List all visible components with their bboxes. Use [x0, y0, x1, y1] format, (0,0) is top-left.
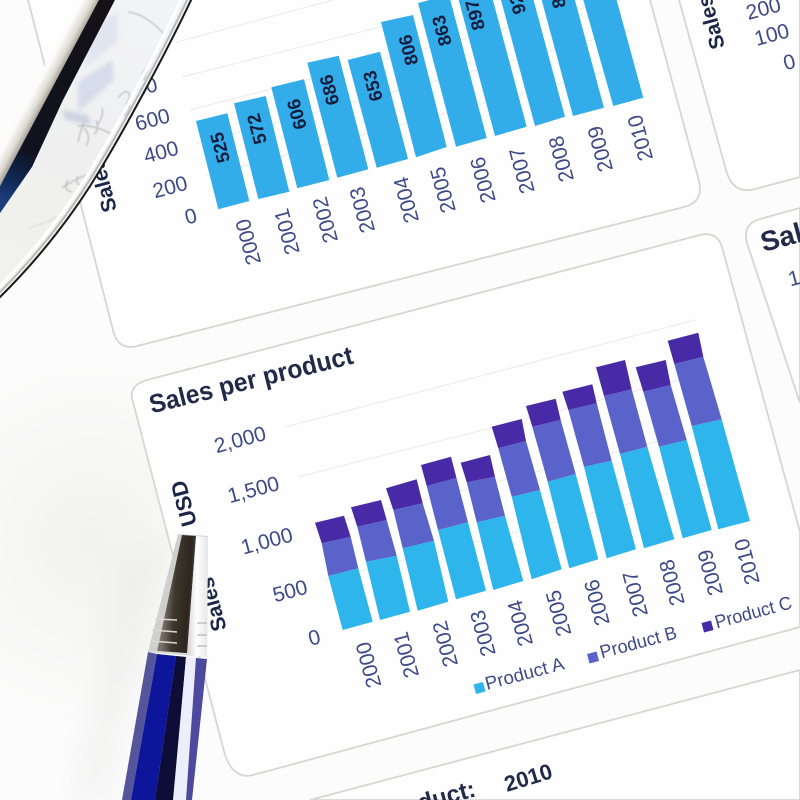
value axis ticks: 200: [150, 172, 190, 203]
frame band: [0, 0, 101, 192]
value axis ticks: [744, 0, 798, 75]
year axis labels: 2004: [390, 174, 424, 225]
panel outline: [746, 208, 800, 403]
year axis labels: 2005: [542, 588, 576, 639]
legend: Product B: [597, 622, 679, 662]
bar value labels: 806: [394, 32, 422, 68]
value axis ticks: 0: [781, 50, 798, 75]
panel: top right chart: [678, 0, 800, 190]
panel outline: [310, 670, 800, 800]
stacked bars: product C: [315, 333, 703, 543]
pen rings: [148, 619, 207, 654]
bar value labels: 525: [206, 130, 234, 165]
year axis labels: 2000: [352, 639, 386, 690]
barrel right edge: [186, 658, 207, 800]
value axis ticks: 1,000: [239, 524, 295, 559]
barrel left edge: [122, 652, 157, 800]
barrel blue body: [131, 654, 176, 800]
value axis ticks: 800: [120, 73, 160, 104]
panel heading: Sales per product: [146, 340, 356, 419]
barrel dark reflection: [155, 656, 186, 800]
bright reflection: [187, 536, 208, 657]
year axis labels: 2002: [429, 618, 463, 669]
value axis ticks: 600: [133, 104, 172, 136]
legend: Product A: [483, 652, 567, 694]
year axis labels: 2008: [545, 133, 579, 184]
value axis ticks: 2,000: [212, 422, 269, 458]
year axis labels: 2004: [504, 597, 538, 649]
axis title: USD: [166, 478, 202, 529]
year axis labels: 2006: [466, 154, 501, 205]
year axis labels: 2007: [505, 145, 540, 196]
grid lines: [285, 320, 735, 580]
year axis labels: 2002: [309, 194, 343, 245]
stacked bars: product A: [328, 419, 750, 630]
bar value labels: 572: [243, 111, 271, 147]
value axis ticks: 100: [752, 19, 792, 51]
pen shadow: [70, 540, 165, 800]
lens inner rim: [0, 0, 182, 288]
value axis ticks: 500: [270, 576, 310, 607]
stacked bars: product B: [322, 357, 722, 576]
bar value labels: 863: [428, 13, 456, 48]
year axis labels: 2010: [730, 536, 765, 587]
grid lines: [177, 0, 638, 176]
value axis ticks: 0: [306, 626, 323, 651]
value axis ticks: 0: [182, 204, 200, 229]
value axis ticks: 400: [141, 137, 181, 168]
year axis labels: 2003: [346, 184, 380, 235]
value axis ticks: [212, 422, 323, 651]
lens rim edge: [0, 0, 188, 294]
axis title: [166, 478, 232, 634]
panel outline: [678, 0, 800, 190]
year axis labels: 2001: [390, 629, 424, 680]
lens glass: [0, 0, 193, 300]
bar chart: sales per year: [196, 0, 643, 209]
value axis ticks: 1,500: [225, 472, 282, 508]
year axis labels: 2006: [580, 577, 615, 628]
metal cone: [148, 534, 208, 657]
year axis labels: 2009: [584, 123, 618, 174]
refracted chart shapes: [62, 12, 118, 125]
legend: [474, 592, 794, 694]
year value: 2010: [501, 759, 555, 797]
legend: Product C: [712, 592, 794, 632]
bar value labels: 686: [315, 72, 343, 108]
year axis labels: 2010: [624, 112, 658, 163]
lens outer rim: [0, 0, 192, 299]
year axis labels: 2000: [232, 216, 266, 267]
refracted handwriting smudges: [28, 12, 164, 228]
year axis labels: 2003: [466, 608, 501, 659]
axis title: Sales: [195, 575, 232, 634]
icon: eyeglasses lens and frame: [0, 0, 193, 300]
bar value labels: [206, 0, 570, 165]
dark reflection: [157, 535, 196, 654]
dark frame stripe: [0, 0, 116, 216]
icon: ballpoint pen: [122, 534, 208, 800]
panel: lower report section: [310, 670, 800, 800]
panel: sales per product: [132, 234, 800, 776]
axis title: Sales: [85, 156, 122, 215]
year axis labels: 2007: [619, 568, 653, 619]
bar value labels: 606: [283, 97, 311, 132]
year axis labels: 2005: [426, 164, 461, 215]
panel outline: [27, 0, 700, 347]
year axis labels: 2001: [270, 206, 305, 257]
value axis ticks: [120, 73, 200, 229]
panel outline: [132, 234, 800, 776]
barrel highlight stripe: [173, 657, 196, 800]
panel: right chart: [746, 208, 800, 403]
bar value labels: 653: [359, 68, 387, 104]
year axis labels: 2008: [655, 557, 690, 608]
year axis labels: 2009: [694, 547, 728, 598]
year axis labels: [232, 112, 658, 267]
panel: top sales chart: [27, 0, 700, 347]
year axis labels: [352, 536, 765, 690]
